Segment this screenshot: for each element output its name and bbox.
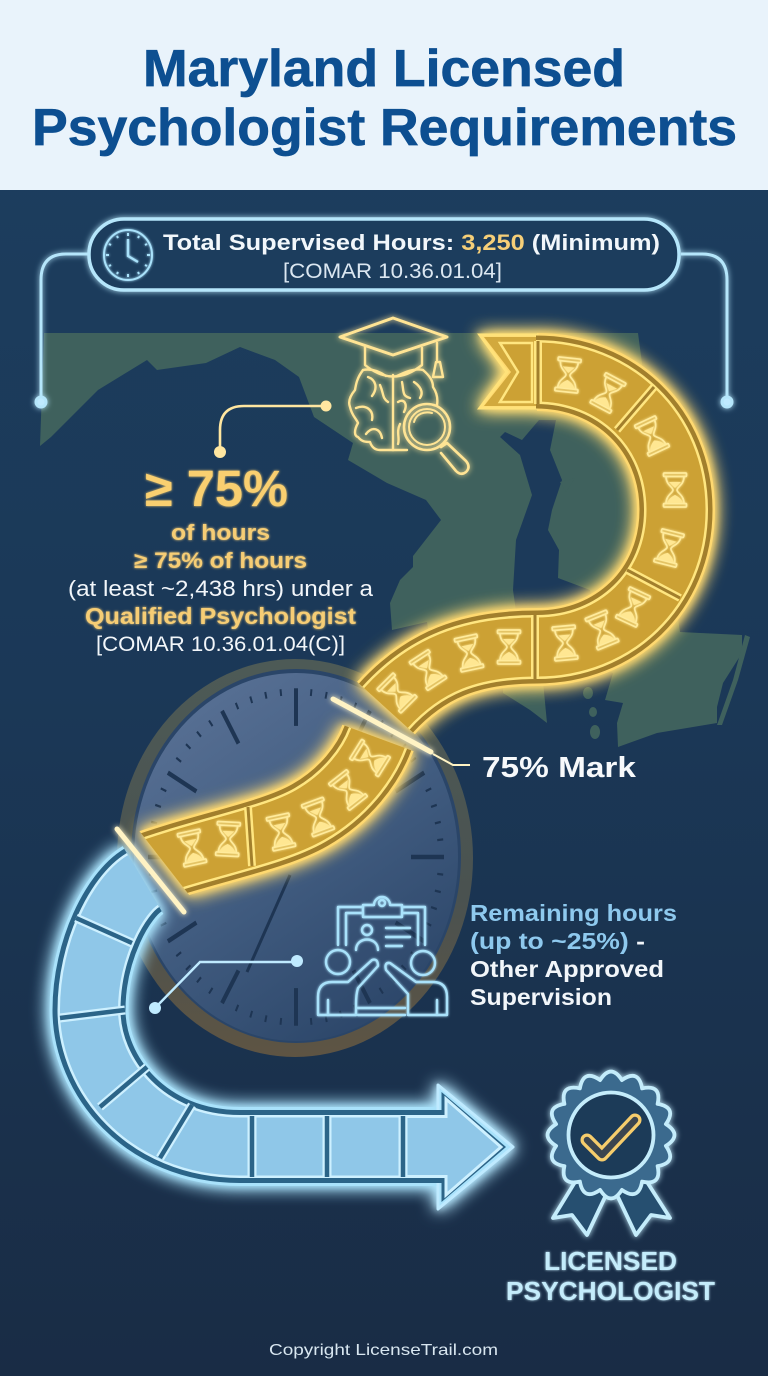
title: [32, 40, 737, 157]
check mark: [587, 1120, 635, 1155]
title: Maryland Licensed: [143, 40, 625, 98]
ribbon dividers: [248, 341, 680, 866]
citation: [COMAR 10.36.01.04]: [283, 260, 502, 283]
75 percent mark label: [433, 752, 637, 784]
blue ribbon: remaining hours arrow: [60, 880, 513, 1209]
bracket lines: [36, 219, 732, 407]
repeated line: ≥ 75% of hours: [134, 548, 307, 573]
header panel: [0, 0, 768, 190]
remaining hours text: [470, 900, 677, 1010]
remaining hours text: Supervision: [470, 984, 612, 1010]
copyright: Copyright LicenseTrail.com: [269, 1342, 498, 1359]
remaining hours text: (up to ~25%) -: [470, 928, 645, 954]
gold connector: [214, 400, 332, 458]
blue connector: [149, 955, 303, 1014]
ribbon tails: [553, 1182, 670, 1235]
gold ribbon: at least 75 percent: [130, 335, 686, 875]
total hours callout: [36, 219, 732, 407]
remaining hours text: Other Approved: [470, 956, 664, 982]
big percentage: ≥ 75%: [145, 460, 288, 517]
text block: 75 percent requirement: [68, 460, 374, 656]
licensed psychologist label: LICENSED: [544, 1246, 677, 1276]
licensed psychologist label: [506, 1246, 715, 1306]
citation: [COMAR 10.36.01.04(C)]: [96, 633, 345, 656]
licensed psychologist label: PSYCHOLOGIST: [506, 1276, 715, 1306]
75 percent mark label: 75% Mark: [482, 752, 637, 784]
title: Psychologist Requirements: [32, 99, 737, 157]
icon: brain with graduation cap and magnifier: [340, 318, 468, 474]
total hours text: Total Supervised Hours: 3,250 (Minimum): [163, 230, 660, 255]
hourglass icons: [177, 357, 686, 867]
icon: supervisor and clipboard: [318, 897, 447, 1015]
icon: license badge: [548, 1072, 674, 1235]
75 percent mark dividers: [117, 699, 431, 912]
seal: [548, 1072, 674, 1198]
clock background: [117, 659, 473, 1057]
at least: (at least ~2,438 hrs) under a: [68, 576, 374, 601]
of hours: of hours: [171, 520, 270, 545]
icon: clock: [104, 230, 152, 280]
segment dividers: [60, 918, 403, 1177]
map of Maryland: [40, 333, 750, 747]
qualified psychologist: Qualified Psychologist: [85, 603, 356, 629]
remaining hours text: Remaining hours: [470, 900, 677, 926]
